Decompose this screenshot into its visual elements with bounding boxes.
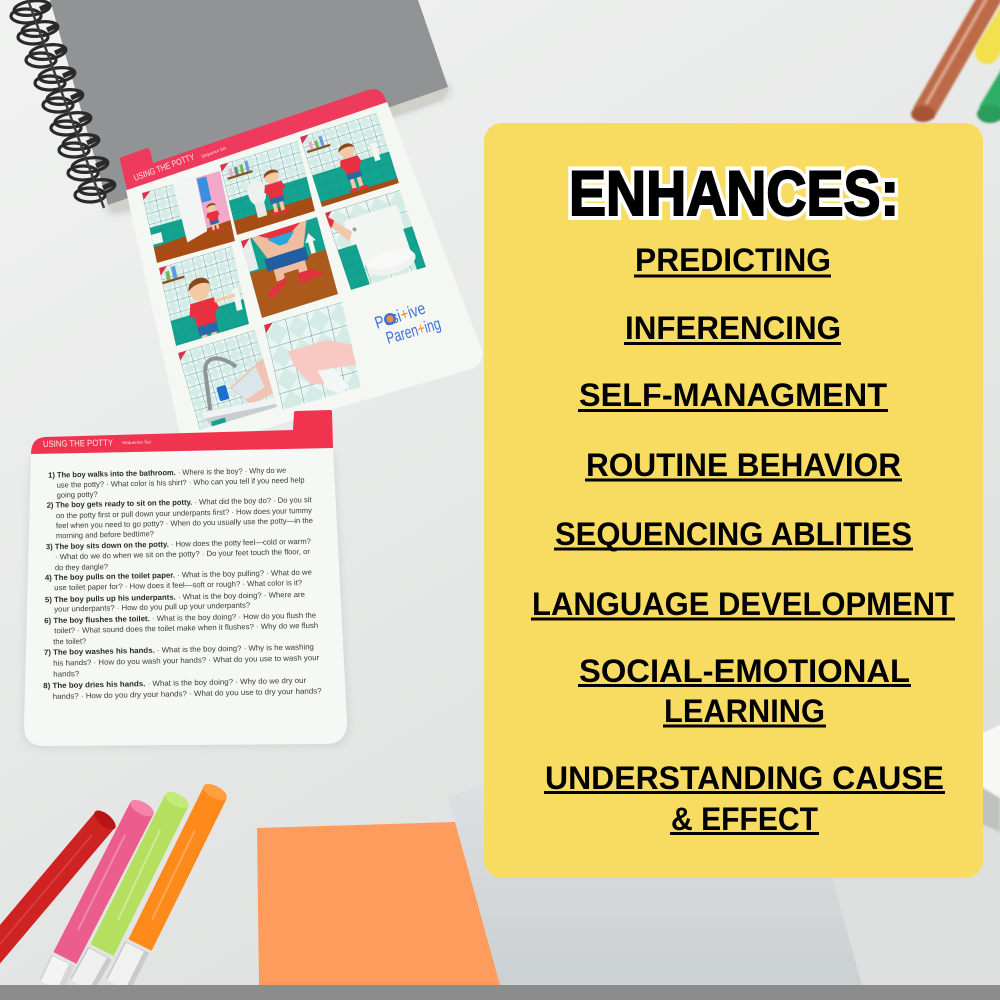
question list: 5) The boy pulls up his underpants. · What is the boy doing? · Where are xyxy=(45,590,305,604)
grey shadow of white object xyxy=(978,785,1000,832)
grey paper sheet xyxy=(448,783,862,985)
bottom left markers xyxy=(0,781,229,985)
question list: 8) The boy dries his hands. · What is the boy doing? · Why do we dry our xyxy=(43,676,307,690)
logo badge xyxy=(384,313,396,325)
heading: ENHANCES: xyxy=(569,159,899,229)
question list: · What do we do when we sit on the potty? · Do your feet touch the floor, or xyxy=(55,547,310,561)
question list: morning and before bedtime? xyxy=(56,529,154,540)
item: social-emotional learning: LEARNING xyxy=(664,693,825,729)
item: sequencing abilities: SEQUENCING ABLITIES xyxy=(555,516,912,552)
card shadow xyxy=(24,452,347,746)
card body xyxy=(24,448,347,746)
green marker xyxy=(80,789,191,985)
spiral binding xyxy=(11,0,116,208)
question list: the toilet? xyxy=(53,637,86,646)
question card xyxy=(24,410,347,746)
logo line one: Posi+ive xyxy=(372,299,428,333)
orange paper xyxy=(257,822,500,985)
bottom grey strip xyxy=(0,985,1000,1000)
card title: USING THE POTTY xyxy=(132,152,196,183)
scene 1 bathroom door xyxy=(142,170,235,263)
question list: 2) The boy gets ready to sit on the potty. · What did the boy do? · Do you sit xyxy=(47,495,313,510)
item: inferencing: INFERENCING xyxy=(625,310,841,346)
spiral notebook xyxy=(11,0,450,212)
question list: hands? xyxy=(53,669,79,679)
white object at right edge xyxy=(978,725,1000,800)
scene 8 drying hands xyxy=(264,301,365,410)
notebook page edge xyxy=(108,87,448,212)
item: self-managment: SELF-MANAGMENT xyxy=(579,377,887,413)
item: predicting: PREDICTING xyxy=(635,242,831,278)
question list: toilet? · What sound does the toilet make when it flushes? · Why do we flush xyxy=(54,621,318,635)
scene 5 pulling up underpants xyxy=(241,217,338,318)
item: social-emotional learning: SOCIAL-EMOTIONAL xyxy=(579,653,910,689)
question list: use toilet paper for? · How does it feel—soft or rough? · What color is it? xyxy=(54,578,302,592)
panel background xyxy=(484,123,983,878)
top right markers xyxy=(911,0,1000,123)
item: language development: LANGUAGE DEVELOPMENT xyxy=(532,586,954,622)
heading: ENHANCES: xyxy=(569,159,899,229)
logo line two: Paren+ing xyxy=(384,314,443,348)
card subtitle: Sequence Set xyxy=(201,145,227,159)
question list: 1) The boy walks into the bathroom. · Where is the boy? · Why do we xyxy=(48,466,286,480)
question list: hands? · How do you dry your hands? · What do you use to dry your hands? xyxy=(53,686,322,701)
question list: 4) The boy pulls on the toilet paper. · What is the boy pulling? · What do we xyxy=(45,568,312,582)
question list: your underpants? · How do you pull up your underpants? xyxy=(54,601,250,614)
card header xyxy=(120,89,387,190)
question list: feel when you need to go potty? · When do you usually use the potty—in the xyxy=(56,516,313,530)
question list: 6) The boy flushes the toilet. · What is the boy doing? · How do you flush the xyxy=(44,611,316,625)
card title: USING THE POTTY xyxy=(43,438,113,449)
panel: enhances list xyxy=(484,123,983,878)
item: social-emotional learning xyxy=(578,653,911,729)
card body xyxy=(126,102,482,452)
scene 3 boy on potty xyxy=(300,113,399,207)
picture card xyxy=(120,89,482,452)
orange marker xyxy=(116,781,229,985)
scene 2 boy at toilet xyxy=(220,141,315,235)
item: understanding cause and effect: & EFFECT xyxy=(671,801,818,837)
question list: do they dangle? xyxy=(55,562,108,572)
question list: going potty? xyxy=(57,490,98,500)
notebook cover xyxy=(50,0,448,205)
question list: use the potty? · What color is his shirt? · Who can you tell if you need help xyxy=(57,476,305,490)
question list: 3) The boy sits down on the potty. · How does the potty feel—cold or warm? xyxy=(46,537,311,551)
brown marker xyxy=(923,0,992,114)
pink marker xyxy=(49,797,156,985)
yellow marker xyxy=(987,2,1000,52)
question list: his hands? · How do you wash your hands? · What do you use to wash your xyxy=(53,653,320,668)
item: routine behavior: ROUTINE BEHAVIOR xyxy=(586,447,901,483)
item: understanding cause and effect xyxy=(544,760,945,837)
question list xyxy=(43,466,322,701)
card subtitle: Sequence Set xyxy=(122,439,152,445)
question list: on the potty first or pull down your underpants first? · How does your tummy xyxy=(56,506,312,520)
question list: 7) The boy washes his hands. · What is the boy doing? · Why is he washing xyxy=(44,642,314,657)
scene 6 flushing toilet xyxy=(325,190,426,290)
card header xyxy=(31,410,333,454)
scene 4 boy pulling toilet paper xyxy=(159,246,249,346)
green marker xyxy=(990,60,1000,114)
logo: Positive Parenting xyxy=(372,299,443,348)
scene 7 washing hands xyxy=(178,330,277,430)
red marker xyxy=(0,807,119,962)
item: understanding cause and effect: UNDERSTANDING CAUSE xyxy=(545,760,944,796)
